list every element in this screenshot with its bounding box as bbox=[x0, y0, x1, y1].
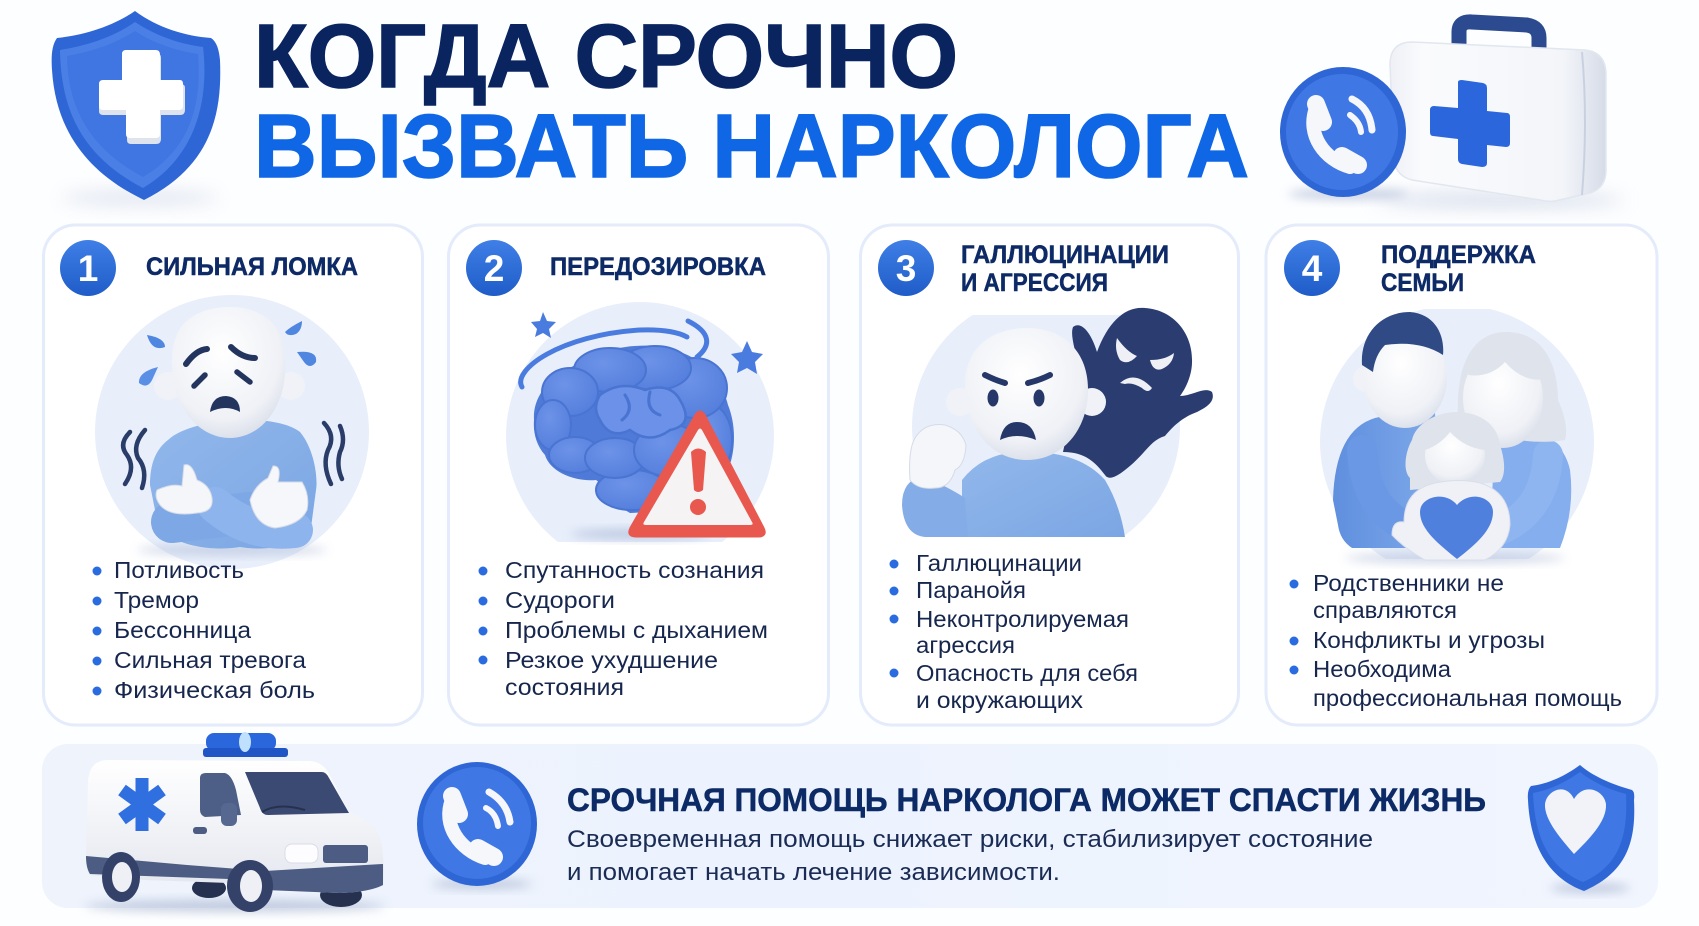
list: withdrawal symptoms: Тремор bbox=[114, 587, 199, 613]
icon: first aid kit bbox=[1375, 22, 1625, 207]
heading: hallucinations and aggression: И АГРЕССИЯ bbox=[961, 269, 1108, 297]
icon: phone circle bbox=[417, 762, 537, 889]
list: hallucination symptoms: Опасность для себя bbox=[916, 660, 1138, 686]
panel: card 4 bbox=[1266, 225, 1657, 725]
list: overdose symptoms bbox=[478, 557, 768, 700]
list: overdose symptoms: Судороги bbox=[505, 587, 615, 613]
list: family support points: Конфликты и угрозы bbox=[1313, 627, 1545, 653]
illustration: angry man and ghost bbox=[902, 308, 1213, 537]
title: КОГДА СРОЧНО bbox=[254, 7, 958, 107]
list: hallucination symptoms: и окружающих bbox=[916, 687, 1084, 713]
list: family support points: Необходима bbox=[1313, 656, 1451, 682]
list: family support points: профессиональная помощь bbox=[1313, 685, 1622, 711]
number badge 3 bbox=[878, 240, 934, 296]
icon: phone circle bbox=[1280, 67, 1408, 200]
heading: family support: СЕМЬИ bbox=[1381, 269, 1464, 297]
list: overdose symptoms: состояния bbox=[505, 674, 624, 700]
panel: card 1 bbox=[44, 225, 422, 725]
list: withdrawal symptoms: Бессонница bbox=[114, 617, 251, 643]
illustration: brain and warning sign bbox=[506, 302, 774, 570]
banner heading: СРОЧНАЯ ПОМОЩЬ НАРКОЛОГА МОЖЕТ СПАСТИ ЖИЗНЬ bbox=[567, 782, 1486, 818]
illustration: family with heart bbox=[1320, 305, 1594, 579]
list: overdose symptoms: Спутанность сознания bbox=[505, 557, 764, 583]
number badge 3: 3 bbox=[896, 248, 916, 289]
list: withdrawal symptoms bbox=[92, 557, 315, 703]
icon: shield with heart bbox=[1528, 765, 1634, 893]
number badge 2 bbox=[466, 240, 522, 296]
heading: severe withdrawal: СИЛЬНАЯ ЛОМКА bbox=[146, 253, 358, 281]
panel: bottom banner bbox=[42, 732, 1658, 912]
number badge 1: 1 bbox=[78, 248, 98, 289]
heading: hallucinations and aggression bbox=[961, 241, 1169, 297]
heading: family support bbox=[1381, 241, 1536, 297]
list: withdrawal symptoms: Потливость bbox=[114, 557, 244, 583]
heading: family support: ПОДДЕРЖКА bbox=[1381, 241, 1536, 269]
title bbox=[254, 7, 1249, 197]
number badge 1 bbox=[60, 240, 116, 296]
panel: card 3 bbox=[860, 225, 1238, 725]
banner text: Своевременная помощь снижает риски, стабилизирует состояние bbox=[567, 826, 1373, 853]
heading: overdose: ПЕРЕДОЗИРОВКА bbox=[550, 253, 766, 281]
list: overdose symptoms: Резкое ухудшение bbox=[505, 647, 718, 673]
list: hallucination symptoms: Галлюцинации bbox=[916, 550, 1082, 576]
icon: ambulance bbox=[85, 732, 385, 912]
list: family support points: справляются bbox=[1313, 597, 1457, 623]
illustration: shivering man bbox=[95, 295, 369, 569]
banner text: и помогает начать лечение зависимости. bbox=[567, 859, 1060, 886]
list: overdose symptoms: Проблемы с дыханием bbox=[505, 617, 768, 643]
number badge 4: 4 bbox=[1302, 248, 1323, 289]
number badge 2: 2 bbox=[484, 248, 504, 289]
list: hallucination symptoms bbox=[890, 550, 1138, 713]
icon: shield with cross bbox=[52, 11, 220, 205]
list: family support points bbox=[1290, 570, 1622, 711]
list: family support points: Родственники не bbox=[1313, 570, 1504, 596]
heading: hallucinations and aggression: ГАЛЛЮЦИНАЦИИ bbox=[961, 241, 1169, 269]
list: hallucination symptoms: Паранойя bbox=[916, 577, 1026, 603]
list: withdrawal symptoms: Физическая боль bbox=[114, 677, 315, 703]
list: hallucination symptoms: агрессия bbox=[916, 632, 1015, 658]
list: hallucination symptoms: Неконтролируемая bbox=[916, 606, 1129, 632]
banner text bbox=[567, 826, 1373, 886]
title: ВЫЗВАТЬ НАРКОЛОГА bbox=[254, 97, 1249, 197]
number badge 4 bbox=[1284, 240, 1340, 296]
list: withdrawal symptoms: Сильная тревога bbox=[114, 647, 306, 673]
panel: card 2 bbox=[448, 225, 828, 725]
